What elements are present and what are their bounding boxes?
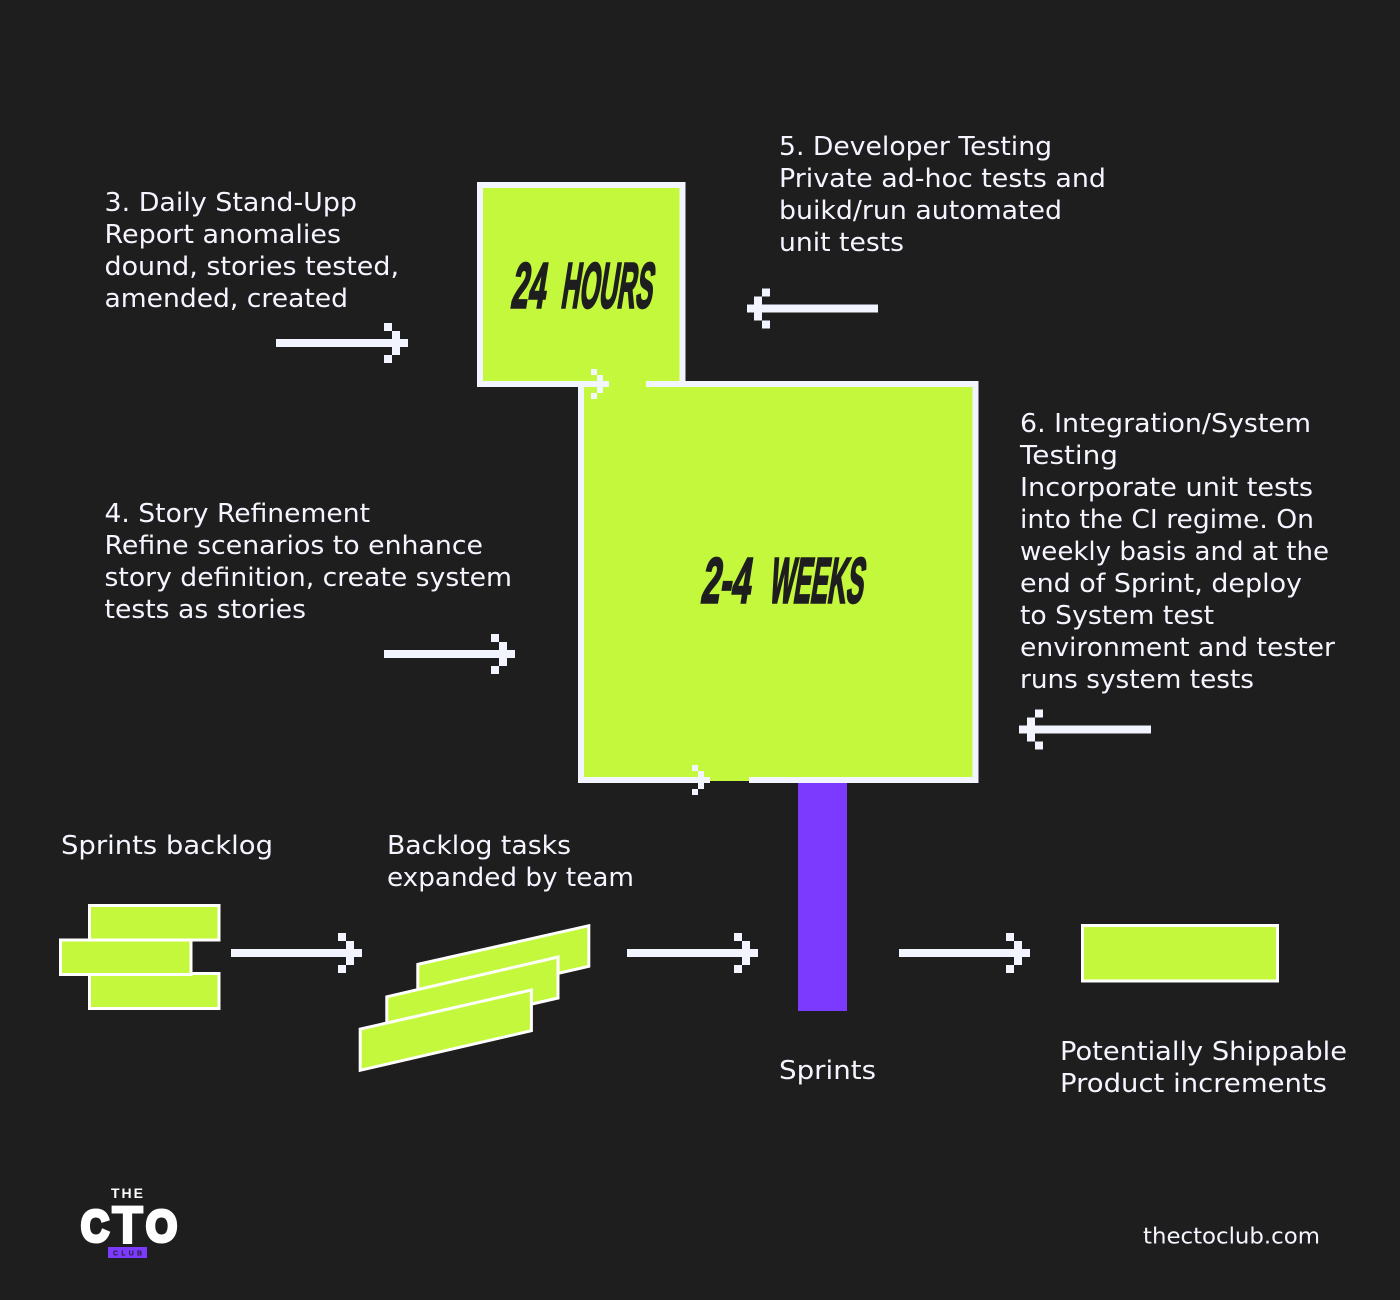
arrow: story refinement to 2-4 weeks — [384, 634, 515, 674]
logo: the cto club: C — [81, 1202, 109, 1251]
text: integration and system testing: runs system tests — [1020, 665, 1254, 695]
text: integration and system testing: end of Sprint, deploy — [1020, 569, 1302, 599]
label: sprints: Sprints — [779, 1056, 876, 1086]
text: developer testing: unit tests — [779, 228, 904, 258]
text: integration and system testing: to System test — [1020, 601, 1214, 631]
panel: 2-4 weeks box: WEEKS — [766, 545, 871, 616]
arrow: developer testing to 24 hours — [747, 288, 878, 328]
icon: skewed task bars — [360, 926, 589, 1070]
text: story refinement: 4. Story Refinement — [104, 499, 370, 529]
text: developer testing: 5. Developer Testing — [779, 132, 1052, 162]
arrow: daily stand-up to 24 hours — [276, 323, 408, 363]
text: story refinement: tests as stories — [104, 595, 306, 625]
heading: 24 hours — [508, 250, 660, 321]
label: potentially shippable product increments: Potentially Shippable — [1060, 1037, 1347, 1067]
text: daily stand-up: Report anomalies — [104, 220, 341, 250]
text: integration and system testing: Testing — [1019, 441, 1118, 471]
logo: the cto club: O — [146, 1202, 177, 1251]
text: developer testing: buikd/run automated — [779, 196, 1062, 226]
panel: 2-4 weeks box — [578, 375, 978, 783]
panel: 24 hours box — [477, 182, 686, 387]
arrow: backlog tasks to sprints — [627, 933, 758, 973]
footer: website: thectoclub.com — [1143, 1224, 1320, 1250]
text: integration and system testing — [1019, 409, 1335, 695]
logo: the cto club: THE — [111, 1185, 143, 1201]
text: developer testing — [779, 132, 1106, 258]
arrow: integration testing to 2-4 weeks — [1019, 710, 1151, 750]
heading: 2-4 weeks: 2-4 — [698, 545, 758, 616]
heading: 24 hours: 24 — [508, 250, 553, 321]
heading: 2-4 weeks — [698, 545, 871, 616]
icon: stacked backlog bars — [60, 906, 219, 1008]
text: daily stand-up: dound, stories tested, — [104, 252, 399, 282]
text: integration and system testing: weekly basis and at the — [1020, 537, 1329, 567]
text: integration and system testing: 6. Integration/System — [1020, 409, 1311, 439]
logo: the cto club — [81, 1185, 177, 1258]
logo: the cto club: T — [112, 1196, 143, 1255]
text: integration and system testing: Incorporate unit tests — [1020, 473, 1313, 503]
text: daily stand-up: 3. Daily Stand-Upp — [104, 188, 357, 218]
icon: product increment block — [1082, 926, 1278, 981]
label: backlog tasks: expanded by team — [387, 863, 634, 893]
label: backlog tasks — [387, 831, 634, 893]
sprints bar — [798, 783, 847, 1011]
logo: the cto club: CLUB — [113, 1250, 142, 1258]
text: integration and system testing: into the CI regime. On — [1020, 505, 1314, 535]
text: story refinement: story definition, create system — [104, 563, 512, 593]
arrow: sprints to product increment — [899, 933, 1030, 973]
text: developer testing: Private ad-hoc tests and — [779, 164, 1106, 194]
label: sprints backlog: Sprints backlog — [61, 831, 273, 861]
panel: 24 hours box: HOURS — [558, 250, 660, 321]
arrow: small arrow on 2-4 weeks box border — [692, 765, 710, 795]
label: potentially shippable product increments: Product increments — [1060, 1069, 1327, 1099]
text: story refinement: Refine scenarios to enhance — [104, 531, 483, 561]
arrow: backlog to backlog tasks — [231, 933, 362, 973]
label: potentially shippable product increments — [1060, 1037, 1347, 1099]
text: story refinement — [104, 499, 512, 625]
arrow: small arrow on 24 hours box border — [591, 369, 609, 399]
text: daily stand-up — [104, 188, 399, 314]
label: backlog tasks: Backlog tasks — [387, 831, 571, 861]
text: daily stand-up: amended, created — [104, 284, 348, 314]
text: integration and system testing: environment and tester — [1020, 633, 1335, 663]
